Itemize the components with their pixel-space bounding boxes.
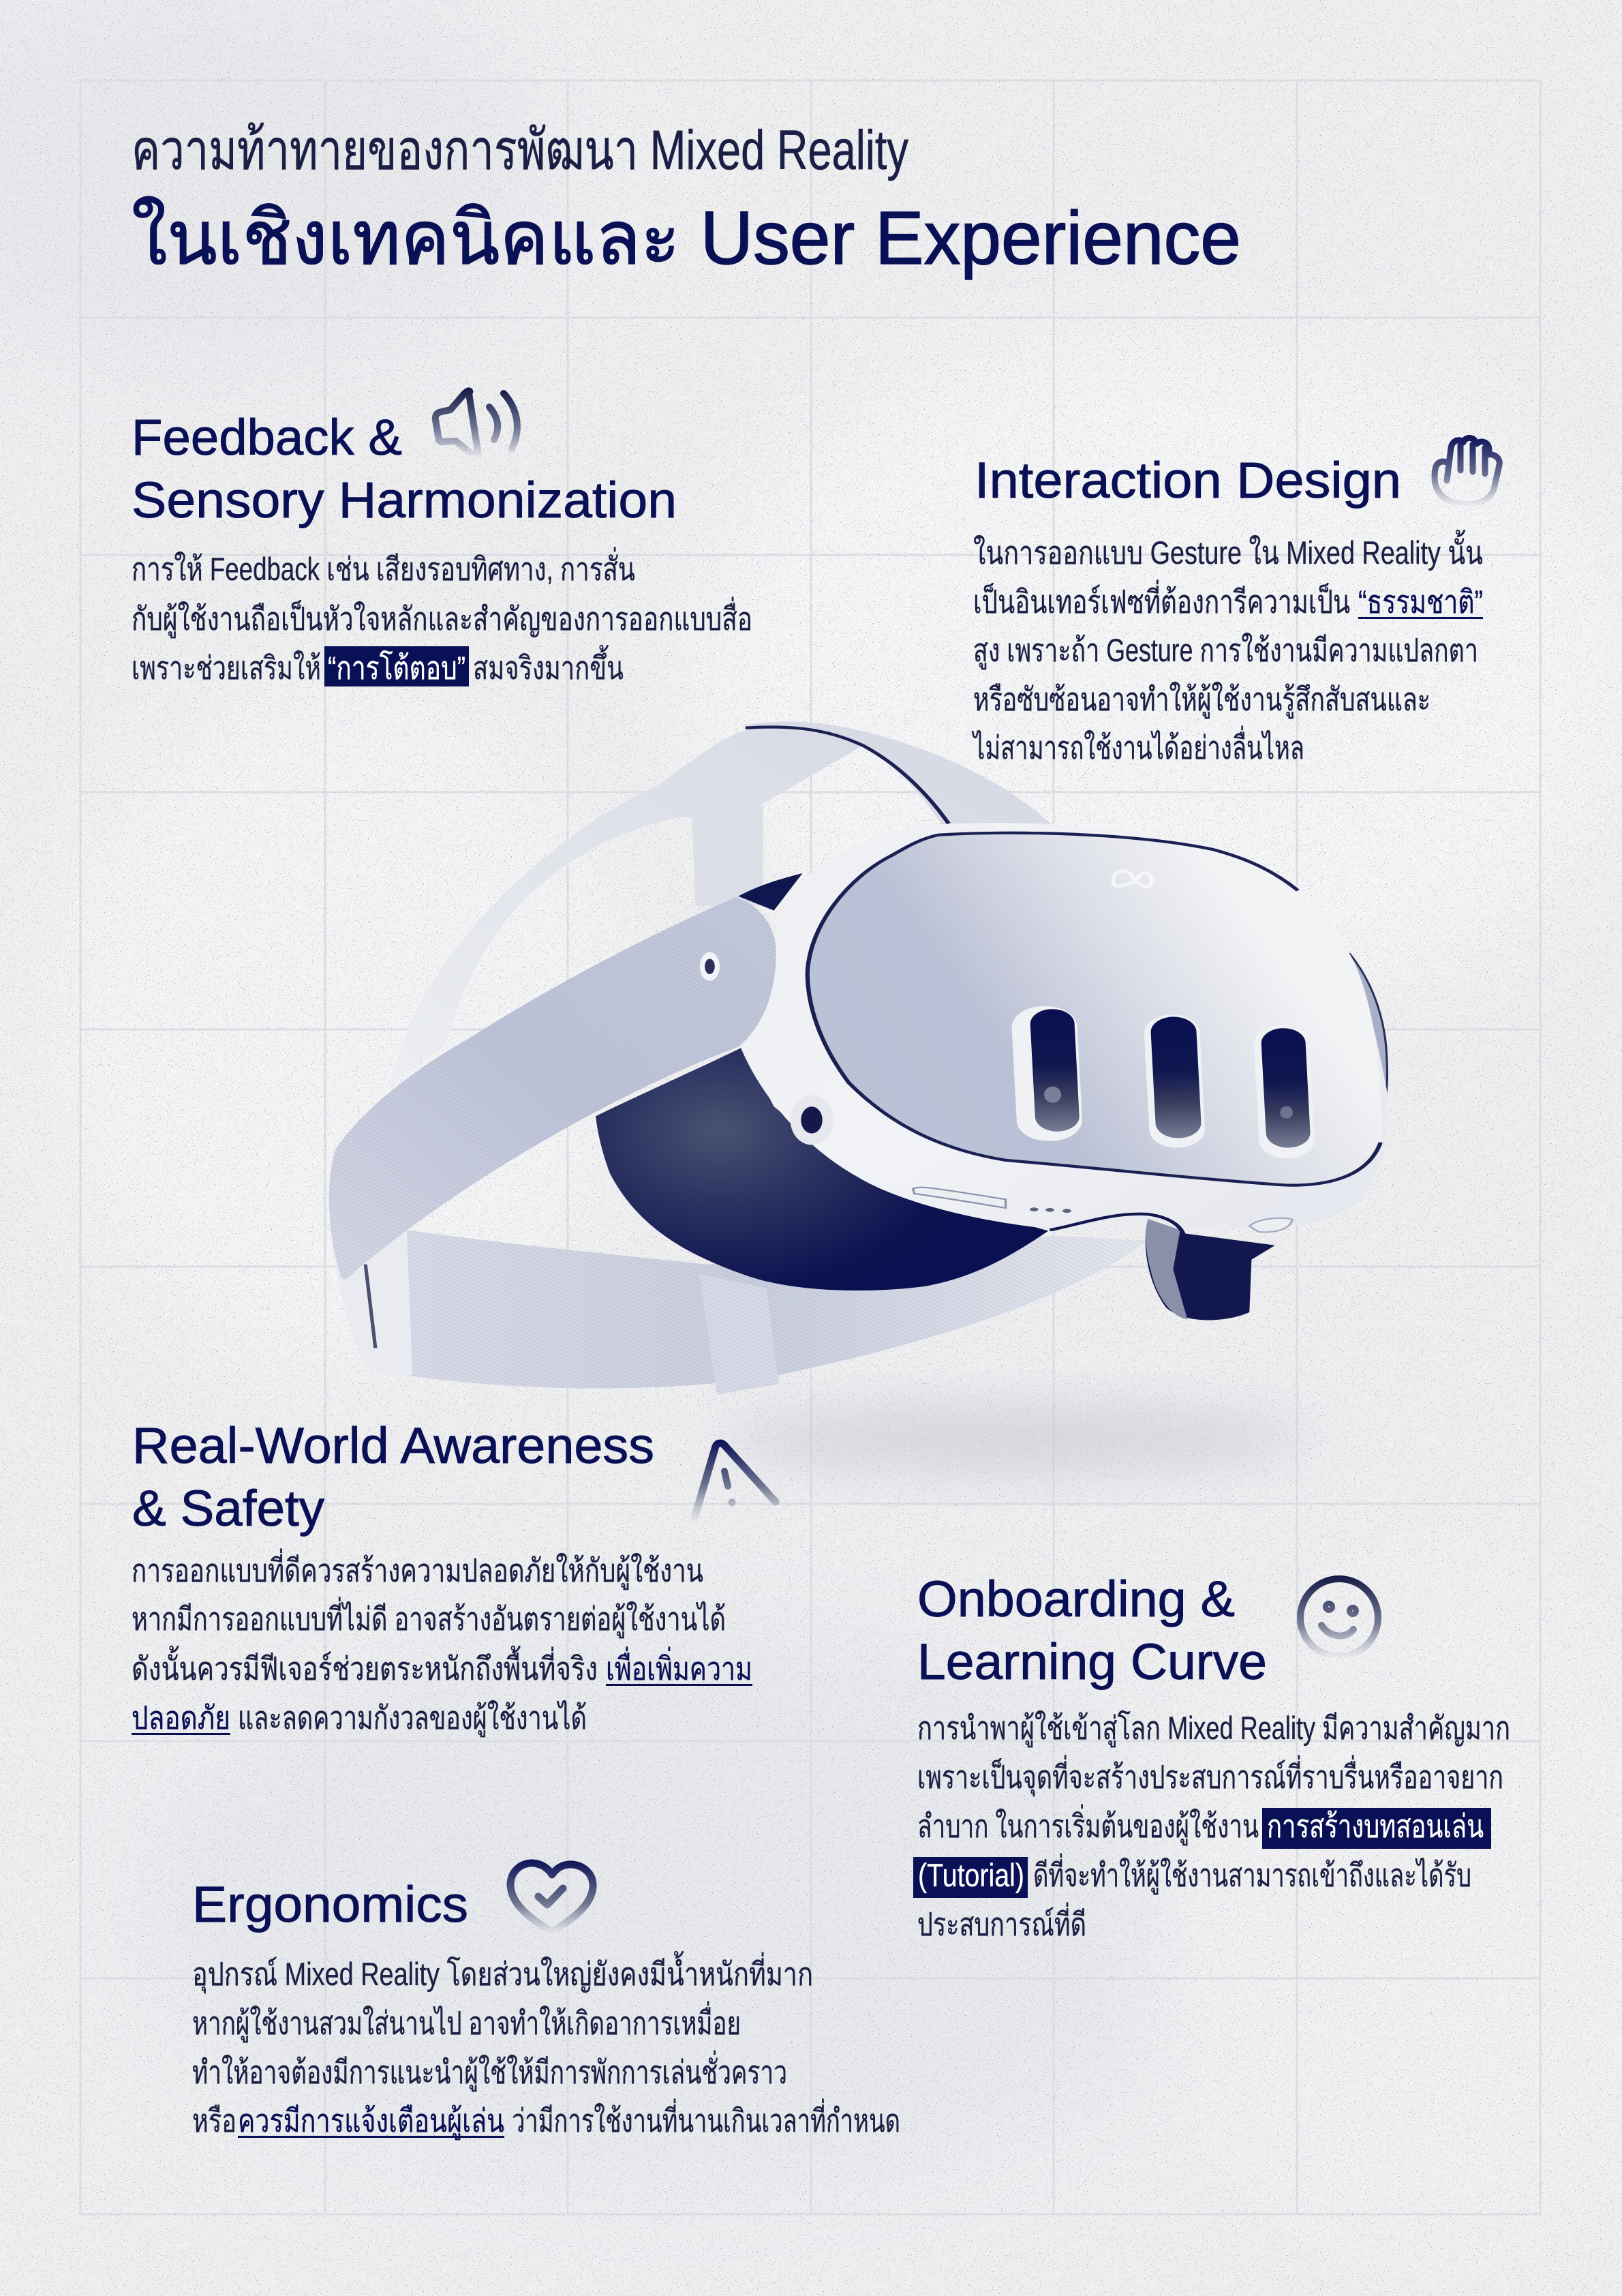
rear strap loop <box>330 1203 412 1376</box>
body text <box>192 1951 900 2139</box>
heading: Interaction Design <box>975 452 1401 509</box>
icon: raised hand <box>1435 438 1499 504</box>
title <box>132 119 1241 280</box>
underlined term: “ธรรมชาติ” <box>1358 584 1483 620</box>
body text: ว่ามีการใช้งานที่นานเกินเวลาที่กำหนด <box>512 2098 900 2139</box>
body text <box>971 530 1483 766</box>
heading <box>917 1571 1267 1690</box>
lower rear strap <box>367 1230 1148 1395</box>
icon: speaker <box>435 391 517 455</box>
heading: Learning Curve <box>917 1633 1267 1690</box>
volume button <box>913 1188 1006 1208</box>
body text <box>132 547 752 686</box>
logo mark <box>1114 871 1152 887</box>
right edge rim <box>1349 953 1387 1102</box>
underlined term: ควรมีการแจ้งเตือนผู้เล่น <box>238 2102 504 2141</box>
title line two: ในเชิงเทคนิคและ User Experience <box>132 196 1241 280</box>
heading <box>132 409 677 528</box>
body text <box>132 1548 726 1738</box>
panel: ergonomics <box>192 1863 900 2141</box>
panel: interaction design <box>971 438 1499 766</box>
body text: ไม่สามารถใช้งานได้อย่างลื่นไหล <box>971 725 1304 766</box>
body text: สมจริงมากขึ้น <box>473 645 624 686</box>
front camera centre <box>1144 1014 1206 1149</box>
body text: ดีที่จะทำให้ผู้ใช้งานสามารถเข้าถึงและได้รับ <box>1033 1853 1471 1895</box>
body text: ประสบการณ์ที่ดี <box>917 1902 1086 1942</box>
body text: กับผู้ใช้งานถือเป็นหัวใจหลักและสำคัญของการออกแบบสื่อ <box>132 596 752 639</box>
body text: อุปกรณ์ Mixed Reality โดยส่วนใหญ่ยังคงมีน้ำหนักที่มาก <box>192 1951 813 1994</box>
body text: ในการออกแบบ Gesture ใน Mixed Reality นั้น <box>973 530 1483 571</box>
dark blind behind strap <box>738 873 802 911</box>
panel: onboarding and learning curve <box>913 1571 1510 1942</box>
headset front panel <box>808 833 1381 1185</box>
side strap <box>329 897 776 1280</box>
heading: Sensory Harmonization <box>132 472 677 528</box>
heading: Real-World Awareness <box>132 1417 654 1474</box>
body text: เป็นอินเทอร์เฟซที่ต้องการีความเป็น <box>973 579 1350 620</box>
heading <box>132 1417 654 1537</box>
panel: real-world awareness and safety <box>132 1417 776 1738</box>
body text: ลำบาก ในการเริ่มต้นของผู้ใช้งาน <box>917 1804 1259 1846</box>
dongle strap <box>1050 1214 1275 1320</box>
body text: หากผู้ใช้งานสวมใส่นานไป อาจทำให้เกิดอาการเหมื่อย <box>192 2001 741 2043</box>
heading: Feedback & <box>132 409 402 466</box>
heading: & Safety <box>132 1480 324 1537</box>
body text: สูง เพราะถ้า Gesture การใช้งานมีความแปลกตา <box>973 632 1478 670</box>
icon: warning triangle <box>694 1443 776 1520</box>
indicator dots <box>1030 1207 1071 1213</box>
underlined term: ปลอดภัย <box>132 1700 230 1736</box>
headset shell <box>740 823 1388 1229</box>
body text: ทำให้อาจต้องมีการแนะนำผู้ใช้ให้มีการพักการเล่นชั่วคราว <box>192 2050 787 2092</box>
highlight: tutorial: การสร้างบทสอนเล่น <box>1267 1808 1484 1844</box>
body text: และลดความกังวลของผู้ใช้งานได้ <box>238 1700 587 1738</box>
body text: หรือ <box>192 2102 236 2139</box>
dark facial interface <box>596 1047 1048 1290</box>
front camera left <box>1011 1006 1083 1142</box>
body text: หากมีการออกแบบที่ไม่ดี อาจสร้างอันตรายต่อผู้ใช้งานได้ <box>132 1597 726 1639</box>
icon: heart with check <box>510 1863 593 1932</box>
headset floor shadow <box>722 1404 1309 1472</box>
underlined term <box>132 1646 752 1736</box>
headset illustration <box>329 721 1388 1395</box>
top head strap <box>389 721 1057 1085</box>
small side button <box>1249 1218 1292 1232</box>
panel: feedback and sensory harmonization <box>132 391 752 686</box>
highlight: interaction: “การโต้ตอบ” <box>328 650 465 686</box>
body text: การให้ Feedback เช่น เสียงรอบทิศทาง, การสั่น <box>132 547 635 587</box>
highlight: tutorial <box>913 1808 1491 1898</box>
underlined term: เพื่อเพิ่มความ <box>606 1646 752 1687</box>
strap hole <box>700 952 720 981</box>
icon: smiley <box>1300 1579 1378 1657</box>
body text: หรือซับซ้อนอาจทำให้ผู้ใช้งานรู้สึกสับสนและ <box>973 681 1430 719</box>
body text: ดังนั้นควรมีฟีเจอร์ช่วยตระหนักถึงพื้นที่จริง <box>132 1646 598 1687</box>
body text <box>917 1710 1510 1942</box>
front camera right <box>1253 1025 1315 1159</box>
heading: Onboarding & <box>917 1571 1235 1627</box>
body text: เพราะช่วยเสริมให้ <box>132 650 321 686</box>
side sensor <box>791 1095 833 1145</box>
heading: Ergonomics <box>192 1876 468 1933</box>
highlight: tutorial: (Tutorial) <box>918 1857 1024 1893</box>
body text: การออกแบบที่ดีควรสร้างความปลอดภัยให้กับผู้ใช้งาน <box>132 1548 703 1590</box>
title line one: ความท้าทายของการพัฒนา Mixed Reality <box>132 119 908 181</box>
